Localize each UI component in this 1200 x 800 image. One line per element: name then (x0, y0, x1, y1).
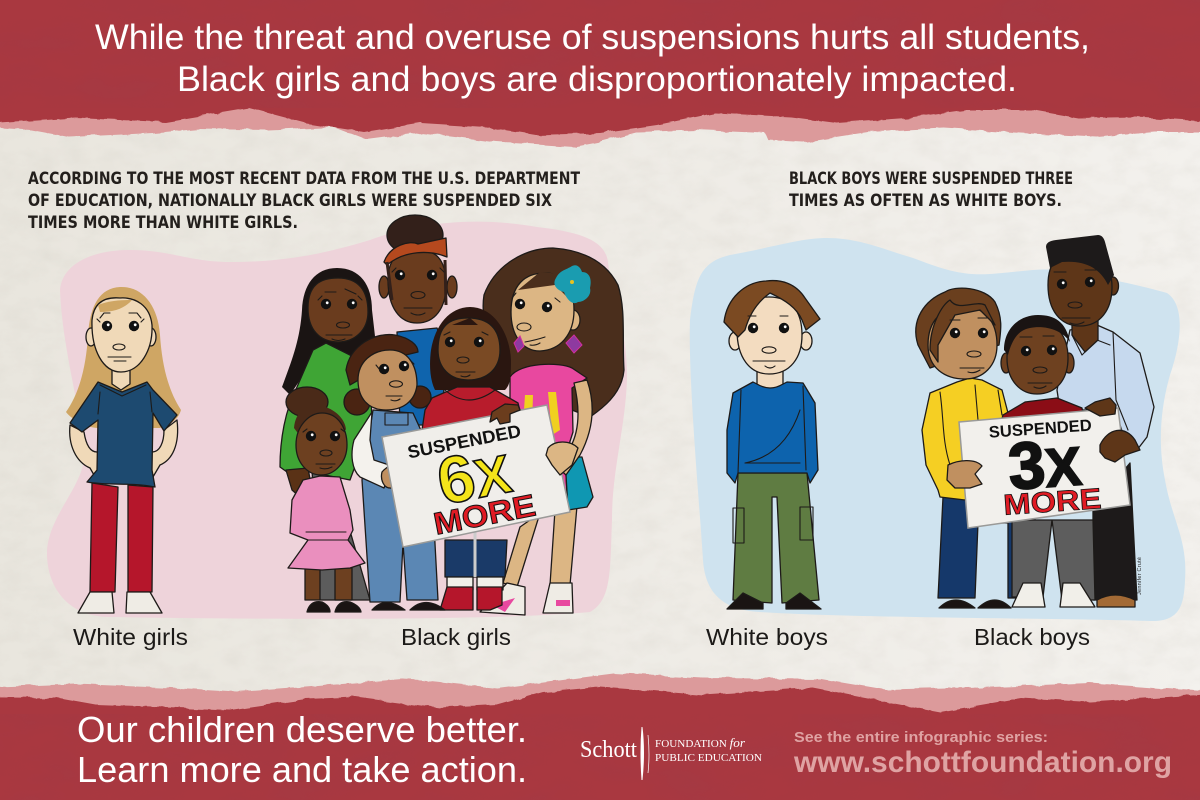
sign: suspended 3x more: MORE (1002, 483, 1102, 522)
girl in pink shirt: head (511, 265, 591, 353)
girl with curly hair: hair (483, 248, 624, 417)
girl in overalls (344, 335, 445, 610)
girl in green: head (308, 278, 368, 342)
girl with headband: shirt (397, 328, 446, 425)
logo: Schott Foundation: Schott (580, 737, 637, 763)
caption: black boys: Black boys (974, 624, 1090, 650)
boy in yellow jacket (916, 288, 1035, 608)
website link: See the entire infographic series: (794, 729, 1048, 746)
text block: girls statistic: ACCORDING TO THE MOST RECENT DATA FROM THE U.S. DEPARTMENT (28, 169, 581, 188)
illustration: group of Black girls (280, 215, 624, 615)
sign: suspended 6x more: SUSPENDED (406, 421, 523, 462)
text block: girls statistic: OF EDUCATION, NATIONALLY BLACK GIRLS WERE SUSPENDED SIX (28, 191, 552, 210)
girl in red shirt: body (422, 387, 525, 610)
text block: boys statistic: BLACK BOYS WERE SUSPENDED THREE (789, 169, 1073, 188)
artist signature: Jennifer Cruté (1137, 557, 1143, 595)
sign: suspended 3x more: SUSPENDED (988, 417, 1092, 442)
text block: girls statistic: TIMES MORE THAN WHITE GIRLS. (28, 213, 298, 232)
title: While the threat and overuse of suspensions hurts all students, (95, 18, 1090, 57)
sign: suspended 6x more: 6X (431, 432, 517, 519)
girl with headband: head (379, 238, 457, 323)
girl in green: hair (282, 268, 376, 395)
title: Black girls and boys are disproportionately impacted. (177, 60, 1017, 99)
panel: blue background blob (690, 238, 1185, 621)
girl in red shirt: head (438, 318, 500, 380)
sign: suspended 6x more: MORE (431, 488, 538, 542)
panel: top torn band (0, 0, 1200, 147)
sign: suspended 3x more: 3X (1006, 424, 1084, 503)
girl in red shirt: hair (430, 307, 511, 390)
boy in red shirt (1000, 315, 1095, 607)
illustration: group of Black boys (916, 235, 1154, 608)
girl with headband: bun (387, 215, 443, 255)
call to action: Learn more and take action. (77, 749, 527, 790)
caption: white girls: White girls (73, 624, 188, 650)
panel: pink background blob (47, 222, 627, 619)
girl in pink shirt: body and legs (480, 364, 593, 615)
text block: boys statistic: TIMES AS OFTEN AS WHITE BOYS. (789, 191, 1062, 210)
small girl in pink dress (286, 387, 365, 612)
hands holding sign (490, 404, 578, 475)
caption: black girls: Black girls (401, 624, 511, 650)
logo: Schott Foundation: FOUNDATION for (655, 735, 746, 750)
hands holding sign (947, 398, 1140, 488)
title (95, 18, 1090, 99)
website link: www.schottfoundation.org (793, 746, 1172, 779)
girl in green: outfit (280, 343, 372, 600)
call to action (77, 709, 527, 790)
illustration: white girl (66, 287, 181, 613)
caption: white boys: White boys (706, 624, 828, 650)
call to action: Our children deserve better. (77, 709, 527, 750)
logo: Schott Foundation: PUBLIC EDUCATION (655, 752, 762, 764)
illustration: white boy (724, 281, 821, 609)
panel: bottom torn band (0, 673, 1200, 800)
logo: Schott Foundation (580, 727, 762, 780)
text block: boys statistic (789, 169, 1073, 210)
tall boy (1046, 235, 1154, 607)
website link (793, 729, 1172, 779)
text block: girls statistic (28, 169, 581, 232)
sign: suspended 6x more (382, 405, 570, 547)
sign: suspended 3x more (959, 408, 1130, 528)
